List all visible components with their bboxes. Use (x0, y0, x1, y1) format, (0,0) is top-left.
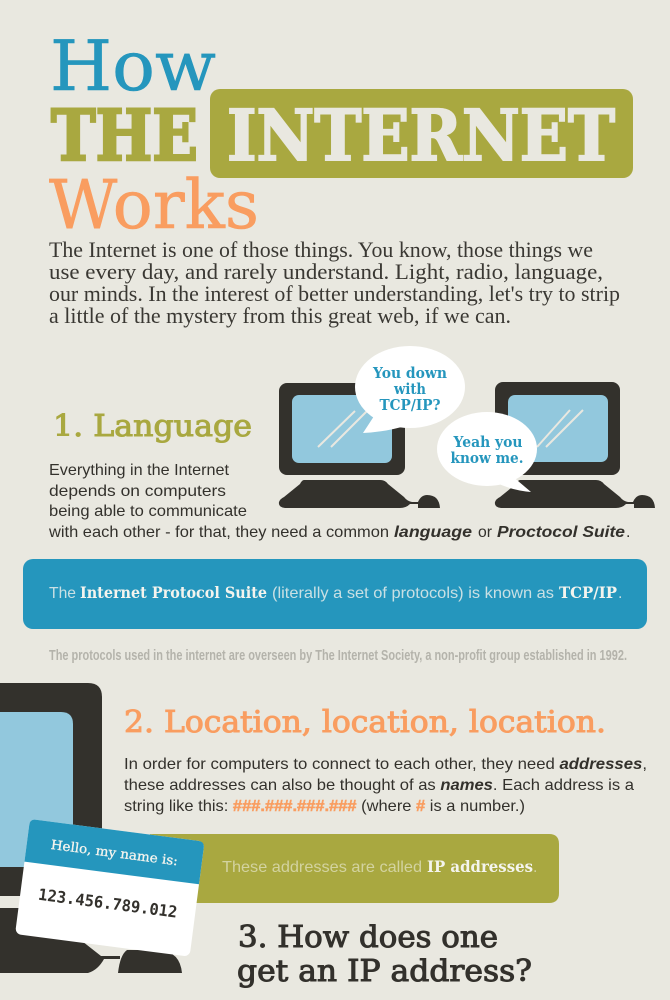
speech bubble: You down with TCP/IP: with (393, 380, 426, 398)
callout: IP addresses: . (533, 859, 537, 876)
section 2 body text: In order for computers to connect to each other, they need addresses, (124, 756, 647, 773)
section 1 body text (48, 462, 630, 541)
speech bubble: You down with TCP/IP: You down (372, 364, 447, 382)
intro paragraph: a little of the mystery from this great web, if we can. (49, 303, 511, 328)
section 1 heading: 1. Language (53, 409, 252, 444)
title badge: INTERNET: INTERNET (227, 94, 615, 177)
section 2 body text: string like this: ###.###.###.### (where # is a number.) (124, 798, 525, 815)
name tag card: Hello, my name is: (50, 838, 179, 869)
speech bubble: You down with TCP/IP: TCP/IP? (380, 396, 441, 414)
callout: Internet Protocol Suite: . (618, 585, 622, 602)
speech bubble: You down with TCP/IP (355, 346, 465, 433)
section 1 body text: with each other - for that, they need a common (48, 524, 389, 541)
speech bubble: Yeah you know me: Yeah you (453, 433, 523, 451)
section 1 body text: being able to communicate (49, 503, 247, 520)
intro paragraph: our minds. In the interest of better understanding, let's try to strip (49, 281, 620, 306)
speech bubble: Yeah you know me (437, 412, 537, 492)
section 2 body text: these addresses can also be thought of as names. Each address is a (124, 777, 634, 794)
icon: right computer (495, 382, 655, 508)
speech bubble: Yeah you know me: know me. (450, 449, 524, 467)
title (49, 27, 633, 244)
callout: Internet Protocol Suite: The (49, 585, 76, 602)
section 1 body text: . (626, 524, 630, 541)
callout: Internet Protocol Suite: TCP/IP (559, 583, 617, 602)
intro paragraph: use every day, and rarely understand. Light, radio, language, (49, 259, 603, 284)
callout: Internet Protocol Suite: Internet Protocol Suite (80, 583, 267, 602)
name tag card: 123.456.789.012 (37, 885, 178, 922)
intro paragraph: The Internet is one of those things. You know, those things we (49, 237, 593, 262)
callout: IP addresses: These addresses are called (222, 859, 422, 876)
callout: Internet Protocol Suite: (literally a set of protocols) is known as (272, 585, 554, 602)
title word: THE: THE (51, 94, 198, 177)
section 1 body text: language (394, 524, 472, 541)
section 1 body text: or (478, 524, 493, 541)
section 3 heading: 3. How does one (238, 920, 498, 955)
section 1 body text: Proctocol Suite (497, 524, 625, 541)
section 2 body text (124, 756, 647, 815)
icon: large computer (0, 683, 182, 973)
intro paragraph (49, 237, 620, 328)
section 2 heading: 2. Location, location, location. (124, 705, 606, 740)
title word: Works: Works (49, 166, 259, 244)
callout: IP addresses: IP addresses (427, 857, 533, 876)
callout: Internet Protocol Suite (23, 559, 647, 629)
section 3 heading (237, 920, 532, 989)
section 3 heading: get an IP address? (237, 954, 532, 989)
icon: left computer (279, 383, 440, 508)
name tag card (15, 819, 205, 957)
callout: IP addresses (150, 834, 559, 903)
section 1 body text: depends on computers (49, 483, 226, 500)
title word: How: How (50, 27, 216, 107)
section 1 body text: Everything in the Internet (49, 462, 230, 479)
